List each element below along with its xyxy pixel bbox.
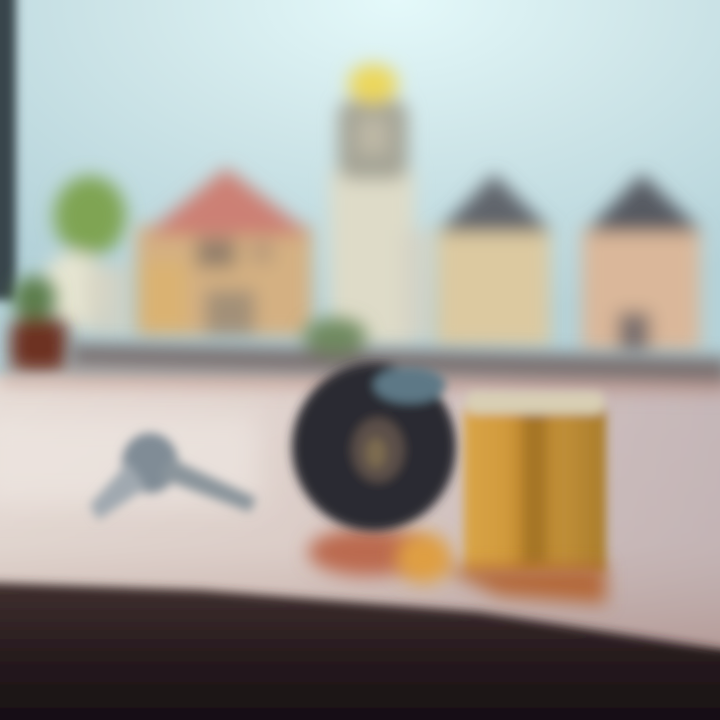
tower with yellow dome (330, 64, 434, 345)
window frame: dark strip at left (0, 0, 16, 300)
ledge: dark band behind the houses (0, 318, 720, 394)
coins: gold stack (464, 392, 606, 574)
house: dark roof, far right (582, 174, 702, 352)
table highlight (0, 415, 260, 505)
tree: green foliage (41, 176, 130, 335)
table: pale surface (0, 376, 720, 656)
house: red roof (136, 168, 312, 336)
key: blue grey (90, 433, 256, 520)
coins: reflection and small coin (396, 533, 606, 604)
table front: dark edge (0, 582, 720, 720)
potted plant (10, 276, 68, 374)
background: pale blue wall (0, 0, 720, 400)
house: dark roof, centre right (436, 174, 552, 346)
clock: dark round object (292, 363, 456, 531)
clock reflection (308, 528, 428, 576)
